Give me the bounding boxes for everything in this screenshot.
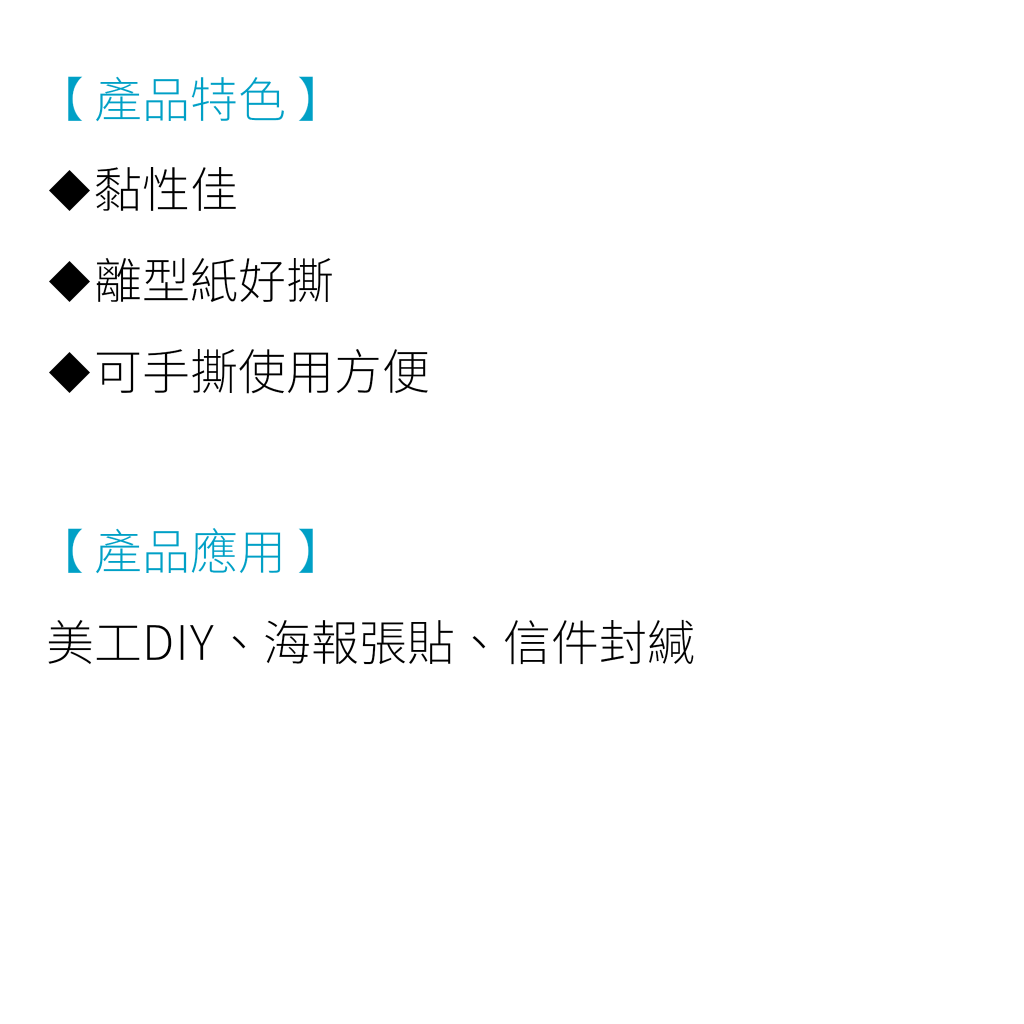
feature: good adhesion: 黏性佳 [94,165,238,218]
heading: product applications [36,527,345,580]
heading: product features: 【 [36,75,84,128]
heading: product features [36,75,345,128]
heading: product applications: 產品應用 [94,527,286,580]
feature: easy-tear release paper: 離型紙好撕 [94,256,334,309]
feature: hand-tearable and convenient: 可手撕使用方便 [94,347,430,400]
heading: product features: 產品特色 [94,75,286,128]
heading: product features: 】 [297,75,345,128]
applications text: 美工DIY、海報張貼、信件封緘 [46,604,695,674]
heading: product applications: 】 [297,527,345,580]
heading: product applications: 【 [36,527,84,580]
